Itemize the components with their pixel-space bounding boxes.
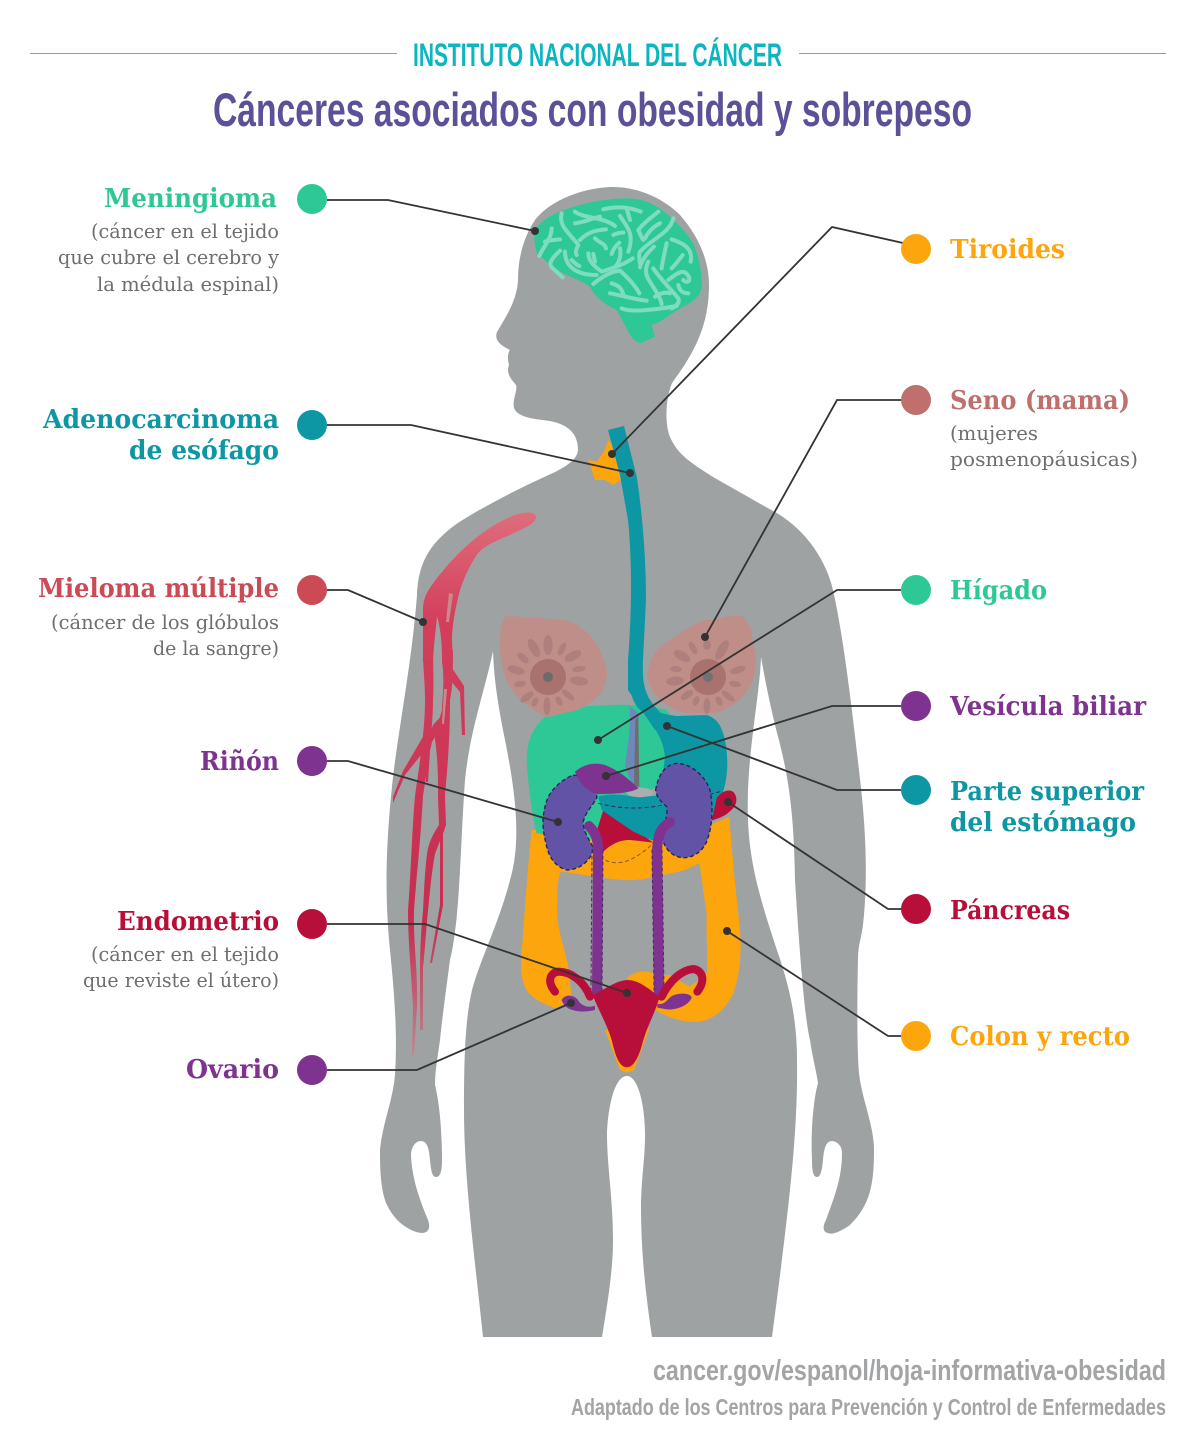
- callout: Mieloma múltiple: [38, 574, 427, 660]
- right breast: [648, 615, 756, 714]
- callout: Páncreas: [724, 798, 1070, 926]
- callout: Ovario: Ovario: [186, 1055, 279, 1085]
- pancreas tail: [712, 790, 736, 821]
- colon and rectum: [521, 817, 741, 1073]
- left side branch: [393, 735, 424, 803]
- callout: Adenocarcinoma de esófago: [42, 405, 634, 477]
- callout: Endometrio: Endometrio: [117, 907, 279, 937]
- callout: Parte superior del estómago: del estómago: [950, 808, 1136, 838]
- callout: Adenocarcinoma de esófago: Adenocarcinoma: [42, 405, 279, 435]
- callout: Seno (mama): [701, 385, 1138, 641]
- callout: Hígado: [594, 575, 1047, 744]
- gallbladder: [575, 764, 638, 794]
- blood vessels in arm (multiple myeloma): [393, 512, 536, 1055]
- outer branch: [450, 668, 465, 735]
- ovaries: [562, 994, 692, 1012]
- small green gap: [585, 808, 605, 822]
- callout: Ovario: [186, 999, 575, 1085]
- callout: Tiroides: [608, 227, 1065, 458]
- pale highlights: [446, 593, 453, 622]
- liver: [527, 705, 670, 840]
- abdominal organs: duodenum and pancreas: [582, 790, 736, 863]
- callout: Seno (mama): Seno (mama): [950, 386, 1130, 416]
- callout: Mieloma múltiple: Mieloma múltiple: [38, 574, 279, 604]
- callout: Parte superior del estómago: Parte superior: [950, 777, 1144, 807]
- callout: Meningioma: (cáncer en el tejido: [91, 220, 279, 243]
- callout: Meningioma: que cubre el cerebro y: [58, 246, 279, 269]
- uterus and fallopian tubes: [550, 969, 702, 1067]
- callout: Vesícula biliar: Vesícula biliar: [949, 692, 1146, 722]
- left breast: [500, 616, 607, 717]
- callout: Colon y recto: [723, 927, 1130, 1052]
- callout: Mieloma múltiple: de la sangre): [153, 637, 279, 660]
- thyroid: [588, 440, 623, 485]
- brain: [534, 198, 702, 343]
- callout: Colon y recto: Colon y recto: [950, 1022, 1130, 1052]
- callout: Seno (mama): posmenopáusicas): [950, 448, 1138, 471]
- callout: Riñón: Riñón: [200, 747, 279, 777]
- callout: Hígado: Hígado: [950, 576, 1047, 606]
- pancreas body: [596, 810, 653, 853]
- left kidney: [543, 775, 597, 870]
- footer: source url and credit: [571, 1355, 1166, 1420]
- callout: Tiroides: Tiroides: [950, 235, 1065, 265]
- body silhouette: [380, 187, 874, 1337]
- callout: Endometrio: que reviste el útero): [83, 969, 279, 992]
- callout: Adenocarcinoma de esófago: de esófago: [129, 436, 279, 466]
- right kidney: [656, 763, 712, 858]
- kidneys: [543, 763, 712, 870]
- ureters: [589, 822, 670, 995]
- thin inner branch: [430, 825, 443, 963]
- right strand: [420, 650, 453, 1030]
- callout: Seno (mama): (mujeres: [950, 422, 1038, 445]
- breasts: [500, 615, 756, 717]
- callout: Endometrio: [83, 907, 631, 997]
- callout: Meningioma: [58, 184, 539, 296]
- callout: Endometrio: (cáncer en el tejido: [91, 943, 279, 966]
- callout: Meningioma: la médula espinal): [97, 273, 279, 296]
- bile duct: [625, 706, 653, 798]
- callout: Páncreas: Páncreas: [950, 896, 1070, 926]
- callout: Parte superior del estómago: [663, 722, 1144, 838]
- short branch: [426, 750, 430, 782]
- upper trunk sweep: [423, 512, 536, 662]
- callout: Meningioma: Meningioma: [104, 184, 277, 214]
- dashed organ outlines: [582, 792, 720, 852]
- left strand: [408, 650, 433, 1055]
- header: institute name with rules: INSTITUTO NACIONAL DEL CÁNCER: [413, 37, 782, 73]
- esophagus: [608, 426, 660, 730]
- duodenum: [598, 794, 667, 841]
- callout: Mieloma múltiple: (cáncer de los glóbulos: [51, 611, 279, 634]
- upper stomach: [628, 667, 727, 817]
- callout: Riñón: [200, 746, 562, 826]
- callout: Vesícula biliar: [602, 691, 1146, 780]
- connector between strands: [426, 712, 445, 760]
